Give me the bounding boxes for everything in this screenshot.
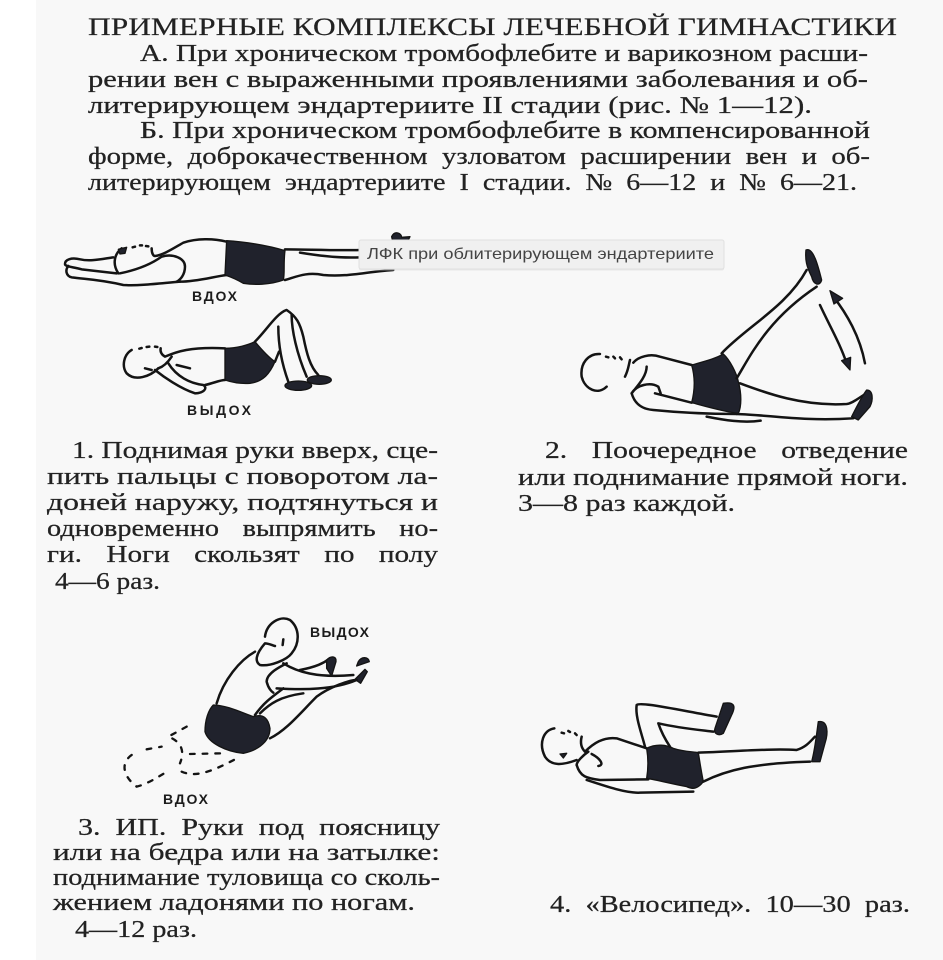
text block: section B: Б. При хроническом тромбофлебите в компенсированной <box>140 118 870 144</box>
caption: exercise 2 <box>518 438 908 517</box>
figure 3: sitting up from lying <box>125 619 369 787</box>
tooltip <box>359 240 724 270</box>
figure 4: bicycle <box>542 703 827 793</box>
dashed outline: starting position <box>125 727 240 787</box>
caption: exercise 3: поднимание туловища со сколь- <box>53 865 440 891</box>
caption: exercise 1: 4—6 раз. <box>55 569 160 595</box>
caption: exercise 1: доней наружу, подтянуться и <box>47 490 438 516</box>
text block: section A: рении вен с выраженными проявлениями заболевания и об- <box>88 67 868 93</box>
caption: exercise 2: или поднимание прямой ноги. <box>518 465 908 491</box>
caption: exercise 3: или на бедра или на затылке: <box>53 840 440 866</box>
arrow: leg down <box>820 305 851 370</box>
text block: section A: А. При хроническом тромбофлебите и варикозном расши- <box>140 41 868 67</box>
caption: exercise 1 <box>47 438 438 595</box>
caption: exercise 3 <box>52 815 440 943</box>
caption: exercise 2: 3—8 раз каждой. <box>518 491 735 517</box>
caption: exercise 1: ги. Ноги скользят по полу <box>47 542 438 568</box>
label: exhale: ВЫДОХ <box>310 624 370 640</box>
caption: exercise 1: 1. Поднимая руки вверх, сце- <box>72 438 438 464</box>
title: ПРИМЕРНЫЕ КОМПЛЕКСЫ ЛЕЧЕБНОЙ ГИМНАСТИКИ <box>88 13 897 41</box>
figure 1: breathing out, knees bent <box>124 310 331 393</box>
tooltip: ЛФК при облитерирующем эндартериите <box>367 246 714 263</box>
text block: section A <box>88 41 868 119</box>
caption: exercise 3: 4—12 раз. <box>75 917 197 943</box>
text block: section B: литерирующем эндартериите I стадии. № 6—12 и № 6—21. <box>88 170 857 196</box>
text block: section A: литерирующем эндартериите II стадии (рис. № 1—12). <box>88 93 812 119</box>
caption: exercise 2: 2. Поочередное отведение <box>545 438 908 464</box>
caption: exercise 1: пить пальцы с поворотом ла- <box>47 464 438 490</box>
caption: exercise 1: одновременно выпрямить но- <box>47 516 438 542</box>
text block: section B: форме, доброкачественном узловатом расширении вен и об- <box>88 144 870 170</box>
arrow: leg up <box>830 291 865 363</box>
label: inhale: ВДОХ <box>192 288 238 304</box>
caption: exercise 4: 4. «Велосипед». 10—30 раз. <box>550 892 910 918</box>
text block: section B <box>88 118 870 196</box>
label: inhale: ВДОХ <box>163 791 209 807</box>
caption: exercise 3: 3. ИП. Руки под поясницу <box>78 815 440 841</box>
label: exhale: ВЫДОХ <box>187 402 252 418</box>
figure 2: straight leg raise <box>581 250 872 422</box>
figure 1: breathing in, lying with arms overhead <box>65 233 410 285</box>
caption: exercise 3: жением ладонями по ногам. <box>52 890 415 916</box>
